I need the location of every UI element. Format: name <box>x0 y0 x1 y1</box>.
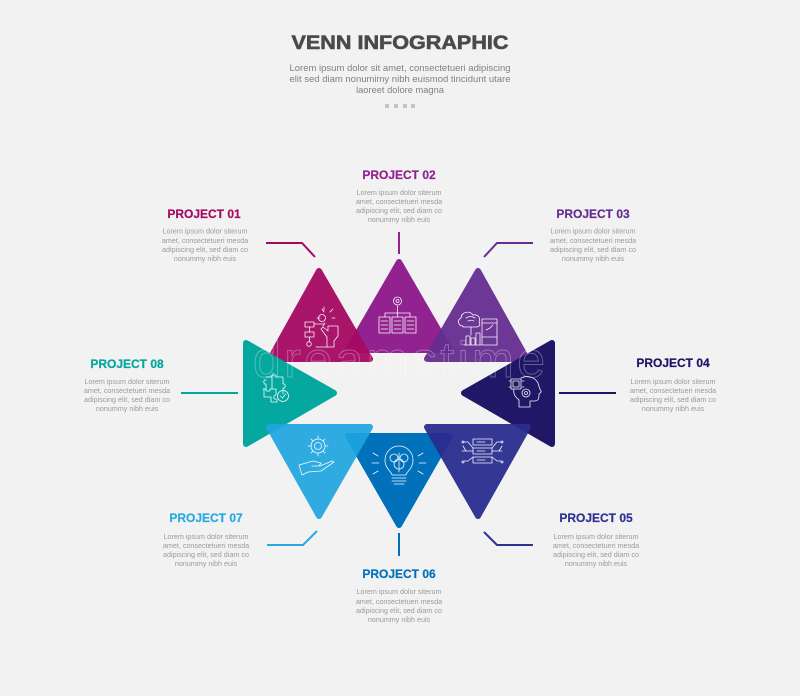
panel: project 07 <box>163 511 317 568</box>
panel: project 06: nonummy nibh euis <box>368 615 431 624</box>
panel: project 03: adipiscing elit, sed diam co <box>550 245 636 254</box>
panel: project 08: PROJECT 08 <box>90 357 164 371</box>
triangle: project 02 <box>348 262 450 350</box>
panel: project 01: PROJECT 01 <box>167 207 241 221</box>
panel: project 02: nonummy nibh euis <box>368 215 431 224</box>
panel: project 03: amet, consectetueri mesda <box>550 236 636 245</box>
icon: project 05 server network <box>462 439 503 463</box>
panel: project 06: Lorem ipsum dolor siterum <box>356 587 442 596</box>
icon: project 03 cloud and devices <box>459 312 497 345</box>
triangle: project 06 <box>348 436 450 525</box>
triangle: project 05 <box>427 427 528 516</box>
triangle: project 04 <box>464 343 552 444</box>
panel: project 05: nonummy nibh euis <box>565 559 628 568</box>
subtitle text: laoreet dolore magna <box>356 85 445 95</box>
panel: project 02 <box>356 168 442 254</box>
panel: project 08: Lorem ipsum dolor siterum <box>84 377 170 386</box>
panel: project 08: nonummy nibh euis <box>96 404 159 413</box>
panel: project 03: PROJECT 03 <box>556 207 630 221</box>
triangle: project 01 <box>270 271 370 359</box>
panel: project 02: adipiscing elit, sed diam co <box>356 206 442 215</box>
panel: project 02: Lorem ipsum dolor siterum <box>356 188 442 197</box>
panel: project 07: nonummy nibh euis <box>175 559 238 568</box>
panel: project 02: PROJECT 02 <box>362 168 436 182</box>
panel: project 04: nonummy nibh euis <box>642 404 705 413</box>
icon: project 07 hand with gear <box>299 436 334 475</box>
panel: project 05: Lorem ipsum dolor siterum <box>553 532 639 541</box>
panel: project 08: amet, consectetueri mesda <box>84 386 170 395</box>
panel: project 04: PROJECT 04 <box>636 356 710 370</box>
panel: project 05: adipiscing elit, sed diam co <box>553 550 639 559</box>
triangle: project 03 <box>427 271 527 359</box>
panel: project 06: PROJECT 06 <box>362 567 436 581</box>
panel: project 08 <box>84 357 238 413</box>
panel: project 07: amet, consectetueri mesda <box>163 541 249 550</box>
panel: project 01 <box>162 207 315 263</box>
subtitle text: elit sed diam nonumimy nibh euismod tincidunt utare <box>290 74 510 84</box>
icon: project 06 light bulb with brain <box>372 446 426 484</box>
panel: project 03: nonummy nibh euis <box>562 254 625 263</box>
panel: project 01: adipiscing elit, sed diam co <box>162 245 248 254</box>
panel: project 01: amet, consectetueri mesda <box>162 236 248 245</box>
panel: project 07: Lorem ipsum dolor siterum <box>163 532 249 541</box>
subtitle text <box>290 63 510 95</box>
decorative dots <box>385 104 415 108</box>
icon: project 04 AI head with chip <box>509 377 541 407</box>
panel: project 02: amet, consectetueri mesda <box>356 197 442 206</box>
icon: project 02 hierarchy boards <box>379 297 416 333</box>
icon: project 01 flowchart and robot hand <box>305 307 338 347</box>
panel: project 04 <box>559 356 716 413</box>
panel: project 08: adipiscing elit, sed diam co <box>84 395 170 404</box>
panel: project 05 <box>484 511 639 568</box>
panel: project 07: adipiscing elit, sed diam co <box>163 550 249 559</box>
triangle: project 08 <box>246 343 334 444</box>
title: VENN INFOGRAPHIC <box>292 32 508 54</box>
panel: project 03 <box>484 207 636 263</box>
panel: project 07: PROJECT 07 <box>169 511 243 525</box>
watermark: dreamstime <box>253 332 545 388</box>
icon: project 08 puzzle with check <box>263 375 288 402</box>
panel: project 01: nonummy nibh euis <box>174 254 237 263</box>
panel: project 06: adipiscing elit, sed diam co <box>356 606 442 615</box>
panel: project 04: Lorem ipsum dolor siterum <box>630 377 716 386</box>
panel: project 01: Lorem ipsum dolor siterum <box>162 226 248 236</box>
triangle: project 07 <box>269 427 370 516</box>
subtitle text: Lorem ipsum dolor sit amet, consectetueri adipiscing <box>290 63 510 73</box>
panel: project 06 <box>356 533 442 624</box>
panel: project 05: PROJECT 05 <box>559 511 633 525</box>
panel: project 03: Lorem ipsum dolor siterum <box>550 226 636 236</box>
panel: project 04: adipiscing elit, sed diam co <box>630 395 716 404</box>
panel: project 06: amet, consectetueri mesda <box>356 597 442 606</box>
panel: project 05: amet, consectetueri mesda <box>553 541 639 550</box>
panel: project 04: amet, consectetueri mesda <box>630 386 716 395</box>
